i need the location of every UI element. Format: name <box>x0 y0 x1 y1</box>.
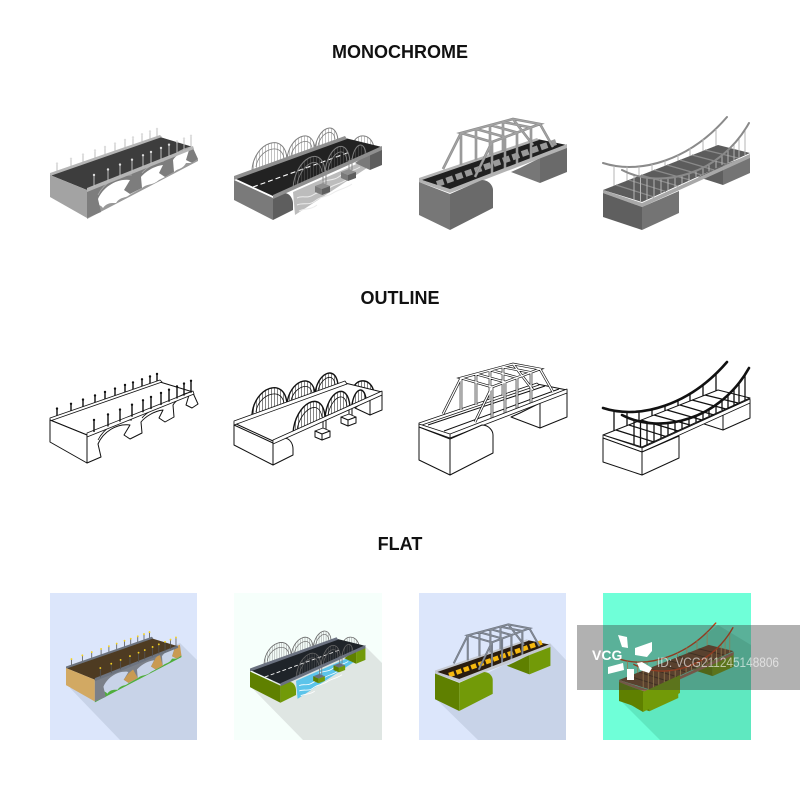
heading: outline: OUTLINE <box>360 288 440 308</box>
panel: flat suspension bridge <box>603 593 751 740</box>
monochrome row <box>50 117 750 230</box>
icon: watermark logo petals <box>608 635 652 680</box>
panel: flat tied-arch road bridge <box>234 593 382 740</box>
icon: monochrome railway truss bridge <box>419 119 567 230</box>
outline row <box>50 362 750 475</box>
panel: flat railway truss bridge <box>419 593 566 740</box>
flat row <box>50 593 751 740</box>
icon: flat suspension bridge front pier <box>619 675 680 712</box>
icon: outline railway truss bridge <box>419 364 567 475</box>
icon: flat arch bridge <box>66 632 181 702</box>
watermark logo text: VCG <box>592 647 622 663</box>
icon: outline suspension bridge <box>603 362 750 475</box>
icon: outline tied-arch road bridge <box>234 373 382 465</box>
heading: flat: FLAT <box>378 534 422 554</box>
icon: flat railway truss bridge <box>435 624 550 711</box>
icon: flat tied-arch road bridge <box>250 631 365 703</box>
icon: monochrome arch bridge with lamps <box>50 129 198 219</box>
icon: monochrome suspension bridge <box>603 117 750 230</box>
panel: flat arch bridge <box>50 593 197 740</box>
heading: monochrome: MONOCHROME <box>332 42 468 62</box>
icon: outline arch bridge with lamps <box>50 374 198 464</box>
icon: flat suspension bridge <box>619 623 734 711</box>
watermark id text: ID: VCG211245148806 <box>657 655 779 670</box>
watermark <box>577 625 800 690</box>
icon: monochrome tied-arch road bridge <box>234 128 382 220</box>
